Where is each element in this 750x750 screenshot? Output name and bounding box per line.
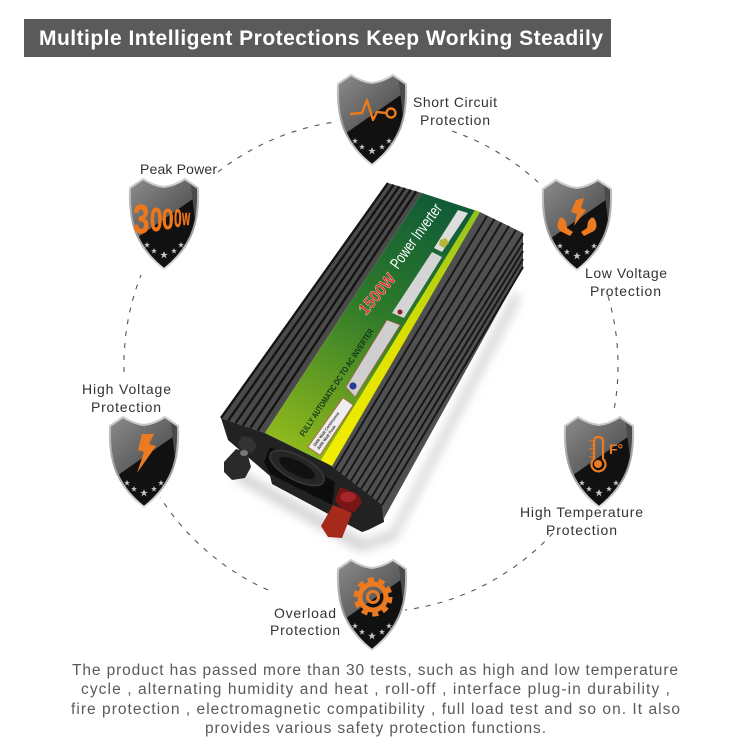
shield: peak power: 0 — [150, 201, 162, 238]
description paragraph: The product has passed more than 30 tests, such as high and low temperature — [72, 662, 678, 679]
label: peak power: Peak Power — [140, 161, 217, 177]
label: high temperature protection: High Temperature — [520, 504, 643, 520]
label: high voltage protection — [82, 381, 171, 415]
power inverter product image — [221, 183, 523, 552]
band label: features — [346, 320, 400, 397]
label: short circuit protection — [413, 94, 497, 128]
shield: high temperature — [563, 415, 635, 507]
label: low voltage protection — [585, 265, 667, 299]
shield: peak power: 0 — [174, 206, 182, 233]
band label: wattage: 3000 Watt Peak — [316, 424, 337, 451]
description paragraph: cycle , alternating humidity and heat , roll-off , interface plug-in durability , — [81, 681, 670, 698]
band label: features badge — [349, 382, 357, 390]
band text: model: 1500W — [355, 269, 400, 319]
lime stripe — [321, 210, 480, 466]
fan plate — [264, 443, 335, 505]
red terminal — [321, 487, 362, 538]
inverter left fin section — [221, 183, 422, 433]
inverter right fin section — [330, 212, 523, 520]
shield: low voltage — [541, 178, 613, 270]
label: overload protection: Protection — [270, 622, 340, 638]
label: low voltage protection: Protection — [590, 283, 661, 299]
band label: certificate — [434, 210, 468, 252]
label: short circuit protection: Protection — [420, 112, 490, 128]
label: low voltage protection: Low Voltage — [585, 265, 667, 281]
label: high voltage protection: High Voltage — [82, 381, 171, 397]
label: overload protection: Overload — [274, 605, 336, 621]
black terminal — [224, 436, 257, 480]
title banner — [24, 19, 611, 57]
inverter soft shadow — [235, 290, 520, 552]
band text: description: FULLY AUTOMATIC DC TO AC INVERTER — [297, 327, 376, 438]
band label: icons strip — [392, 252, 442, 318]
description paragraph: provides various safety protection functions. — [205, 720, 546, 737]
shield: high voltage — [108, 415, 180, 507]
green label band — [265, 193, 480, 465]
label: high voltage protection: Protection — [91, 399, 161, 415]
label: overload protection — [270, 605, 340, 638]
shield: peak power: W — [182, 208, 191, 229]
dashed ring connecting the protections — [124, 122, 618, 610]
band label: wattage: 1500 Watt Continuous — [312, 410, 341, 448]
label: high temperature protection: Protection — [546, 522, 617, 538]
title banner: Multiple Intelligent Protections Keep Working Steadily — [39, 27, 603, 50]
shield: high temperature: F° — [609, 441, 623, 457]
shield: peak power: 3 — [133, 196, 149, 242]
band label: small icon red — [398, 310, 402, 314]
band label: certificate square — [439, 238, 449, 248]
label: short circuit protection: Short Circuit — [413, 94, 497, 110]
shield: overload — [336, 558, 408, 650]
inverter front face — [221, 418, 384, 532]
band text: product name: Power Inverter — [387, 200, 446, 272]
description paragraph — [71, 662, 680, 737]
description paragraph: fire protection , electromagnetic compatibility , full load test and so on. It also — [71, 701, 680, 718]
shield: short circuit — [336, 73, 408, 165]
shield: peak power: 0 — [162, 204, 174, 236]
label: high temperature protection — [520, 504, 643, 538]
shield: peak power — [128, 177, 200, 269]
band label: wattage — [308, 398, 353, 455]
